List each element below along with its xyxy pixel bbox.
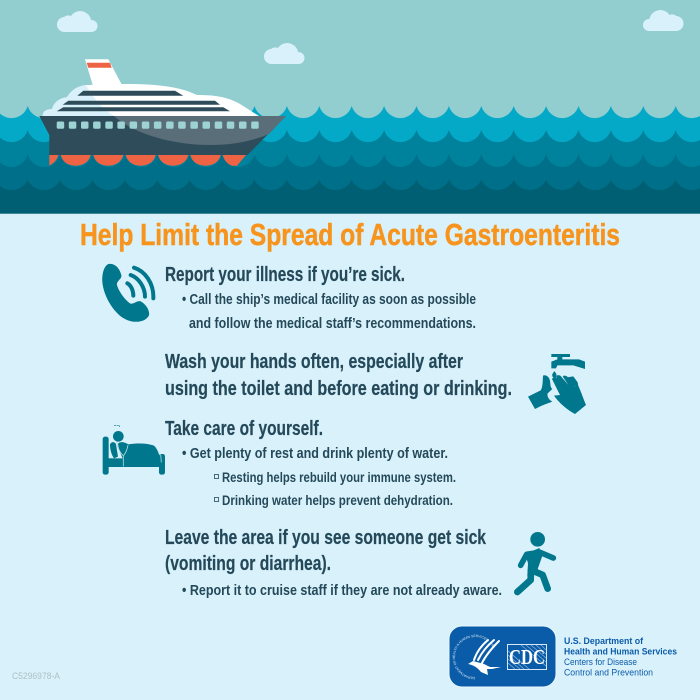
icon: cloud left — [57, 11, 98, 32]
ship funnel — [85, 59, 122, 86]
logo: HHS seal: DEPARTMENT OF HEALTH & HUMAN SERVICES · USA · — [452, 634, 495, 680]
icon: person resting in bed — [103, 425, 165, 475]
text block: wash your hands: Wash your hands often, especially after — [165, 351, 463, 373]
text block: report your illness: and follow the medical staff’s recommendations. — [189, 316, 476, 332]
text block: leave the area — [165, 527, 502, 599]
text block: wash your hands — [165, 351, 512, 400]
text block: agency names: Control and Prevention — [564, 668, 653, 678]
text block: take care of yourself: Take care of yourself. — [165, 418, 323, 440]
text block: leave the area: (vomiting or diarrhea). — [165, 553, 331, 575]
text block: agency names — [564, 636, 677, 678]
ship windows — [57, 122, 259, 129]
icon: person walking away — [517, 532, 553, 592]
text block: report your illness: Report your illness if you’re sick. — [165, 264, 405, 286]
text block: report your illness — [165, 264, 476, 332]
code: publication number: C5296978-A — [12, 671, 60, 681]
text block: leave the area: Leave the area if you see someone get sick — [165, 527, 487, 549]
ship hull — [39, 116, 286, 155]
icon: cloud right — [643, 10, 684, 31]
cruise ship — [39, 59, 286, 166]
text block: agency names: Health and Human Services — [564, 646, 677, 656]
text block: leave the area: • Report it to cruise staff if they are not already aware. — [182, 583, 502, 599]
text block: wash your hands: using the toilet and before eating or drinking. — [165, 378, 512, 400]
icon: hand washing under faucet — [528, 354, 586, 414]
text block: take care of yourself — [165, 418, 456, 508]
text block: agency names: U.S. Department of — [564, 636, 644, 646]
logo: HHS and CDC badge — [448, 626, 556, 688]
text block: report your illness: • Call the ship’s medical facility as soon as possible — [182, 292, 476, 308]
text block: agency names: Centers for Disease — [564, 657, 637, 667]
ship superstructure — [43, 84, 259, 116]
panel: sea and sky scene — [0, 0, 700, 214]
icon: telephone — [102, 264, 153, 322]
text block: take care of yourself: • Get plenty of rest and drink plenty of water. — [182, 446, 448, 462]
ship orange waterline — [49, 155, 246, 166]
icon: cloud middle — [264, 43, 305, 64]
sub-bullet: drinking water: Drinking water helps prevent dehydration. — [222, 493, 453, 508]
logo: CDC mark: CDC — [509, 645, 545, 669]
sub-bullet: resting: Resting helps rebuild your immune system. — [222, 470, 456, 485]
